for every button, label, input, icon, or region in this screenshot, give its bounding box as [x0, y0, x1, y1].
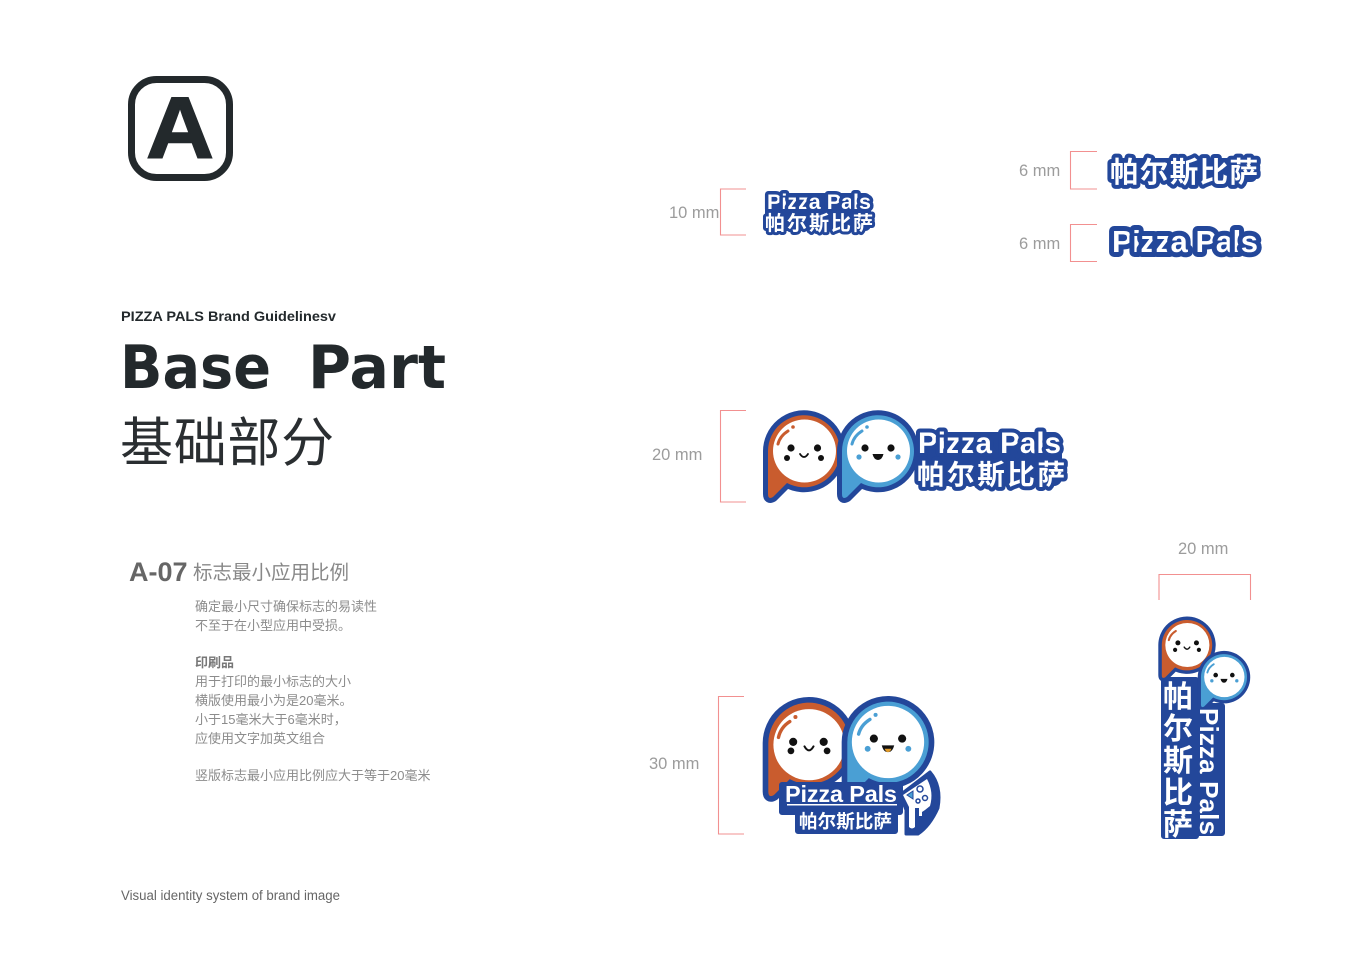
measure: 6 mm English	[1019, 224, 1097, 262]
English wordmark, vertical: Pizza Pals	[1194, 708, 1224, 835]
wordmark: Pizza Pals	[918, 427, 1061, 460]
measure: 10 mm	[669, 189, 746, 235]
icon: blue bubble	[847, 702, 929, 795]
icon: blue bubble	[1201, 654, 1247, 707]
description text block: 不至于在小型应用中受损。	[195, 618, 351, 633]
Chinese wordmark, vertical: 斯	[1163, 745, 1193, 778]
logo: 10 mm stacked wordmark: 帕尔斯比萨	[765, 212, 873, 235]
measure: 6 mm English: 6 mm	[1019, 235, 1060, 253]
description text block: 竖版标志最小应用比例应大于等于20毫米	[195, 768, 430, 783]
section heading A-07: 标志最小应用比例	[193, 562, 349, 584]
measure: 10 mm: 10 mm	[669, 204, 719, 222]
description text block: 横版使用最小为是20毫米。	[195, 693, 352, 708]
measure: 6 mm Chinese: 6 mm	[1019, 162, 1060, 180]
description text block: 应使用文字加英文组合	[195, 731, 325, 746]
logo: 20 mm horizontal	[768, 415, 1065, 498]
Chinese wordmark, vertical: 比	[1163, 777, 1193, 810]
wordmark backing	[1164, 680, 1222, 836]
measure: 20 mm vertical: 20 mm	[1178, 540, 1228, 558]
measure: 20 mm vertical	[1159, 540, 1250, 600]
wordmark backing	[782, 785, 900, 831]
section heading A-07	[129, 557, 349, 587]
icon: orange bubble	[1162, 620, 1212, 678]
brand guidelines heading: PIZZA PALS Brand Guidelinesv	[121, 308, 336, 324]
logo: 10 mm stacked wordmark	[765, 190, 873, 235]
wordmark	[916, 427, 1065, 490]
title: Chinese: 基础部分	[120, 414, 335, 473]
Chinese wordmark, vertical: 萨	[1163, 809, 1193, 842]
Chinese wordmark, vertical	[1163, 681, 1193, 842]
wordmark: 帕尔斯比萨	[917, 459, 1065, 490]
icon: section letter A badge	[132, 80, 230, 178]
wordmark	[785, 781, 897, 832]
icon: orange bubble	[768, 415, 840, 498]
icon: blue bubble	[842, 415, 914, 498]
icon: pizza slice	[900, 772, 939, 834]
icon: orange bubble	[768, 703, 850, 796]
title: Base Part: Base	[120, 333, 271, 403]
measure: 20 mm horizontal	[652, 410, 746, 502]
measure: 30 mm combined	[649, 696, 744, 834]
Chinese wordmark, vertical: 帕	[1163, 681, 1193, 714]
footer note: Visual identity system of brand image	[121, 888, 340, 903]
measure: 6 mm Chinese	[1019, 152, 1097, 189]
description text block: 小于15毫米大于6毫米时，	[195, 712, 347, 727]
description text block: 印刷品	[195, 655, 234, 670]
icon: section letter A badge: A	[146, 80, 214, 177]
wordmark: 帕尔斯比萨	[799, 811, 892, 832]
measure: 30 mm combined: 30 mm	[649, 755, 699, 773]
title: Base Part: Part	[308, 333, 446, 403]
logo: 6 mm Chinese wordmark: 帕尔斯比萨	[1110, 157, 1258, 189]
measure: 20 mm horizontal: 20 mm	[652, 446, 702, 464]
logo: 10 mm stacked wordmark: Pizza Pals	[767, 190, 871, 214]
section heading A-07: A-07	[129, 557, 188, 587]
wordmark: Pizza Pals	[785, 781, 897, 807]
title: Base Part	[120, 333, 446, 403]
description text block: 用于打印的最小标志的大小	[195, 674, 351, 689]
Chinese wordmark, vertical: 尔	[1163, 713, 1193, 746]
logo: 30 mm combined with pizza	[768, 702, 939, 834]
description text block: 确定最小尺寸确保标志的易读性	[195, 599, 377, 614]
logo: 6 mm English wordmark: Pizza Pals	[1112, 224, 1258, 259]
logo: vertical lockup	[1162, 620, 1247, 842]
description text block	[195, 599, 430, 783]
